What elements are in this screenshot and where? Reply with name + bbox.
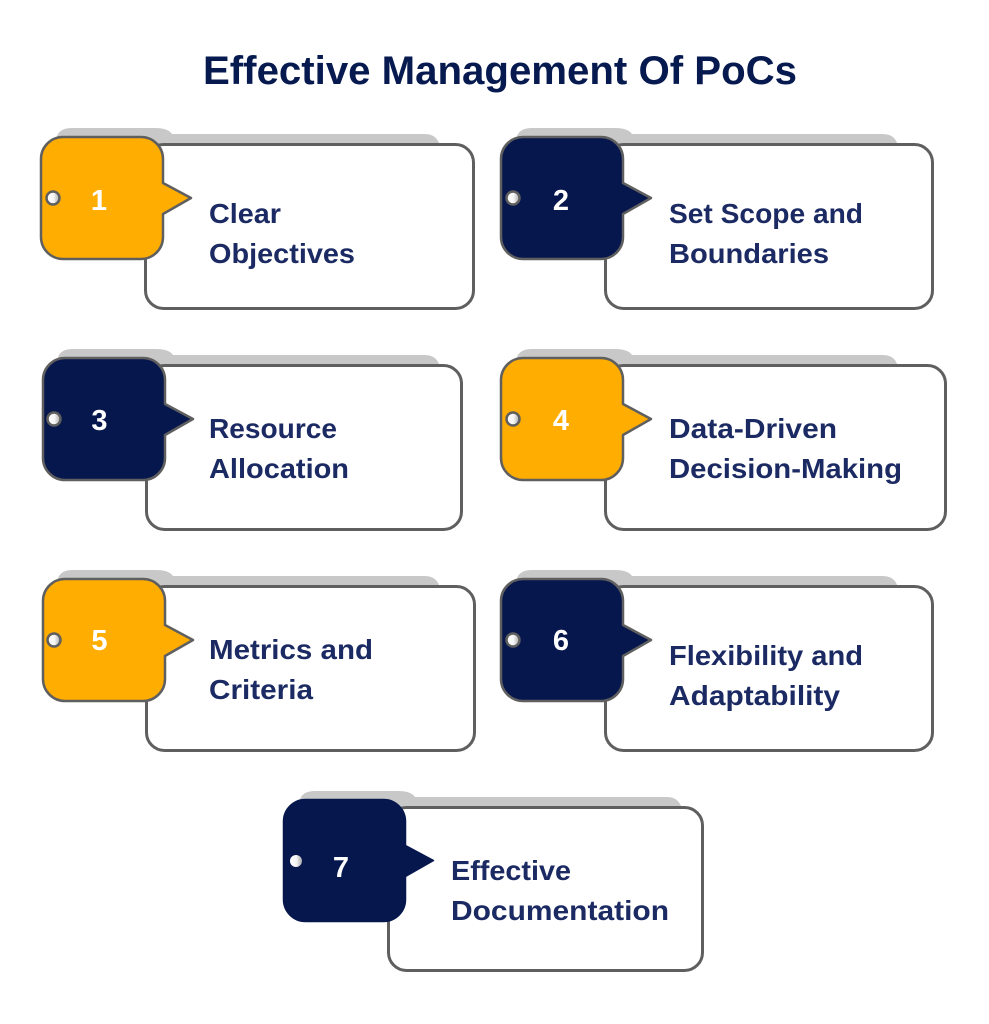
badge 4: 4 <box>553 405 569 437</box>
panel: 3 Resource Allocation <box>43 349 462 530</box>
badge 3: 3 <box>91 405 108 437</box>
label 4: Data-Driven <box>669 413 837 444</box>
badge 7 <box>284 800 434 922</box>
badge 6: 6 <box>553 625 569 657</box>
label 6: Flexibility and <box>669 640 863 671</box>
badge 5: 5 <box>91 625 108 657</box>
label 6: Adaptability <box>669 680 841 711</box>
badge 5 <box>43 579 193 701</box>
panel: 2 Set Scope and Boundaries <box>501 128 932 308</box>
label 4: Decision-Making <box>669 453 902 484</box>
label 4 <box>669 413 902 484</box>
badge 4 <box>501 358 651 480</box>
label 5: Criteria <box>209 674 314 705</box>
title: Effective Management Of PoCs <box>203 49 797 93</box>
label 3: Resource <box>209 413 337 444</box>
badge 2: 2 <box>553 185 569 217</box>
label 3 <box>209 413 349 484</box>
badge 1: 1 <box>91 185 107 217</box>
panel: 1 Clear Objectives <box>41 128 474 308</box>
label 2 <box>669 198 863 269</box>
label 1: Objectives <box>209 238 355 269</box>
label 5 <box>209 634 373 705</box>
label 3: Allocation <box>209 453 349 484</box>
panel: 6 Flexibility and Adaptability <box>501 570 932 750</box>
badge 3 <box>43 358 193 480</box>
badge 2 <box>501 137 651 259</box>
label 7 <box>451 855 669 926</box>
label 7: Documentation <box>451 895 669 926</box>
label 1: Clear <box>209 198 281 229</box>
panel: 5 Metrics and Criteria <box>43 570 474 750</box>
label 2: Set Scope and <box>669 198 863 229</box>
badge 6 <box>501 579 651 701</box>
label 7: Effective <box>451 855 571 886</box>
label 1 <box>209 198 355 269</box>
label 5: Metrics and <box>209 634 373 665</box>
panel: 4 Data-Driven Decision-Making <box>501 349 946 530</box>
badge 1 <box>41 137 191 259</box>
panel: 7 Effective Documentation <box>284 791 702 970</box>
badge 7: 7 <box>333 852 349 884</box>
label 6 <box>669 640 863 711</box>
label 2: Boundaries <box>669 238 829 269</box>
